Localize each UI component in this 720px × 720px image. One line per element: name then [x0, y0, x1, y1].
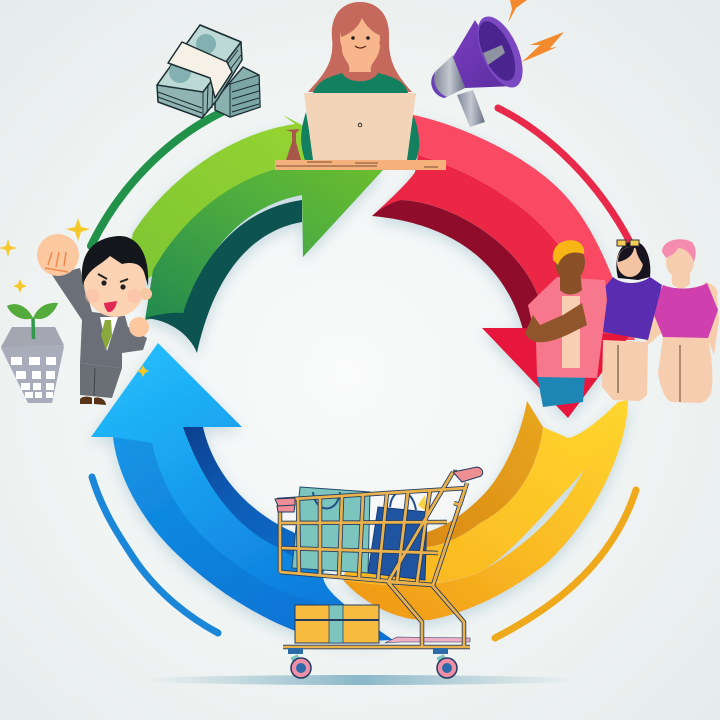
arrow: red — [372, 115, 635, 418]
wheels — [288, 651, 457, 678]
icon: shopping cart — [275, 467, 483, 678]
arrow: blue — [91, 343, 393, 641]
person: woman with sunglasses — [598, 240, 662, 401]
icon: megaphone — [431, 0, 564, 127]
person: pink-haired woman — [640, 239, 719, 403]
arrow: yellow — [343, 400, 628, 620]
icon: seedling in planter — [1, 303, 64, 403]
icon: money stacks — [157, 25, 260, 118]
shopping bag: teal — [292, 487, 370, 573]
figure: woman with laptop — [275, 2, 446, 170]
shopping bag: navy — [368, 507, 427, 580]
thin arc: red — [498, 108, 630, 242]
figures: group of three people — [525, 239, 719, 407]
figure: businessman — [0, 218, 152, 405]
arrow: green — [118, 115, 383, 353]
thin arc: yellow — [495, 490, 636, 638]
ground shadow — [140, 675, 580, 685]
person: man in pink shirt — [525, 240, 607, 407]
thin arc: green — [91, 112, 222, 246]
thin arc: blue — [92, 477, 218, 633]
gift box — [295, 605, 379, 643]
